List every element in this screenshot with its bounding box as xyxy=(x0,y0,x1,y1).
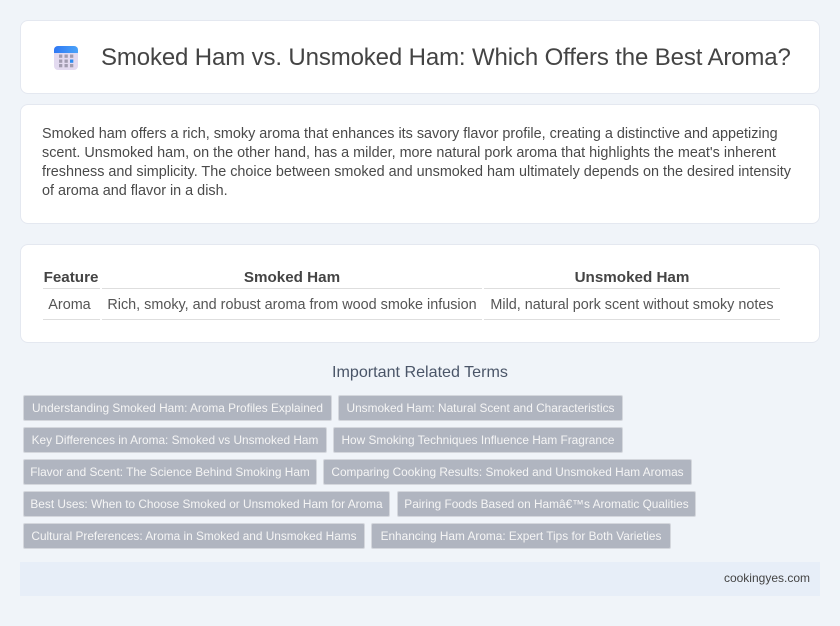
tag xyxy=(333,427,623,453)
tag xyxy=(23,523,365,549)
heading: related terms: Important Related Terms xyxy=(332,363,508,381)
table header: smoked ham: Smoked Ham xyxy=(244,269,340,286)
title: Smoked Ham vs. Unsmoked Ham: Which Offers the Best Aroma? xyxy=(101,44,791,71)
tag list xyxy=(23,395,696,549)
tag: Pairing Foods Based on Hamâ€™s Aromatic Qualities xyxy=(404,497,689,511)
tag xyxy=(397,491,696,517)
tag: Flavor and Scent: The Science Behind Smoking Ham xyxy=(30,465,310,479)
tag xyxy=(23,395,332,421)
panel: title header xyxy=(20,20,820,94)
table cell: smoked aroma: Rich, smoky, and robust aroma from wood smoke infusion xyxy=(107,297,477,313)
tag: Key Differences in Aroma: Smoked vs Unsmoked Ham xyxy=(32,433,318,447)
table header: feature: Feature xyxy=(44,269,98,286)
footer bar xyxy=(20,562,820,596)
tag: How Smoking Techniques Influence Ham Fragrance xyxy=(342,433,614,447)
tag xyxy=(23,459,317,485)
tag: Unsmoked Ham: Natural Scent and Characteristics xyxy=(347,401,614,415)
text block: intro: freshness and simplicity. The choice between smoked and unsmoked ham ultimately depends on the desired intensity xyxy=(42,164,791,180)
text block: intro: scent. Unsmoked ham, on the other hand, has a milder, more natural pork aroma that highlights the meat's inherent xyxy=(42,145,776,161)
footer source: cookingyes.com xyxy=(724,571,810,585)
panel: comparison table xyxy=(20,244,820,343)
text block: intro: Smoked ham offers a rich, smoky aroma that enhances its savory flavor profile, creating a distinctive and appetizing xyxy=(42,126,778,142)
tag: Comparing Cooking Results: Smoked and Unsmoked Ham Aromas xyxy=(331,465,684,479)
tag: Understanding Smoked Ham: Aroma Profiles Explained xyxy=(32,401,323,415)
text block: intro xyxy=(42,126,791,199)
table header: unsmoked ham: Unsmoked Ham xyxy=(575,269,689,286)
tag: Enhancing Ham Aroma: Expert Tips for Both Varieties xyxy=(381,529,661,543)
tag: Cultural Preferences: Aroma in Smoked and Unsmoked Hams xyxy=(31,529,357,543)
icon: calendar xyxy=(54,46,78,70)
tag: Best Uses: When to Choose Smoked or Unsmoked Ham for Aroma xyxy=(30,497,383,511)
tag xyxy=(23,491,390,517)
table cell: unsmoked aroma: Mild, natural pork scent without smoky notes xyxy=(490,297,774,313)
tag xyxy=(23,427,327,453)
tag xyxy=(323,459,692,485)
text block: intro: of aroma and flavor in a dish. xyxy=(42,183,228,199)
tag xyxy=(338,395,623,421)
panel: intro text xyxy=(20,104,820,224)
table cell: aroma: Aroma xyxy=(48,297,91,313)
tag xyxy=(371,523,671,549)
